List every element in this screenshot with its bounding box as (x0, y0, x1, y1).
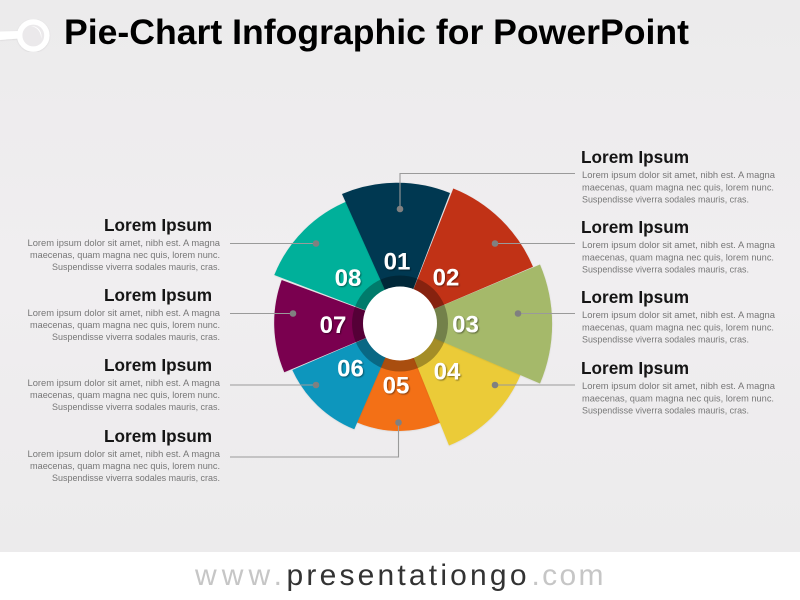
text block 04: maecenas, quam magna nec quis, lorem nunc. (582, 393, 774, 403)
number 07: 07 (320, 312, 346, 339)
text block 03 (581, 287, 776, 344)
leader 05 (230, 419, 402, 457)
number 04: 04 (434, 358, 461, 386)
leader 07 (230, 310, 296, 317)
text block 03: maecenas, quam magna nec quis, lorem nunc. (582, 322, 774, 332)
footer url: presentationgo (286, 559, 526, 592)
wedge 01 (342, 183, 450, 324)
text block 05: Lorem Ipsum (104, 426, 212, 446)
number 01: 01 (384, 248, 410, 276)
wedge 04 (400, 324, 521, 446)
footer url: www. (194, 559, 282, 592)
text block 01: Suspendisse viverra sodales mauris, cras. (582, 194, 749, 204)
text block 06: Suspendisse viverra sodales mauris, cras. (52, 402, 220, 412)
number 05: 05 (383, 372, 409, 400)
number 06: 06 (337, 356, 364, 382)
text block 05 (28, 426, 221, 483)
text block 02: Suspendisse viverra sodales mauris, cras. (582, 264, 749, 274)
leader 01 (397, 174, 575, 212)
text block 01: maecenas, quam magna nec quis, lorem nunc. (582, 182, 774, 192)
wedge 06 (292, 324, 400, 429)
text block 08: Lorem Ipsum (104, 215, 212, 235)
text block 08: maecenas, quam magna nec quis, lorem nunc. (30, 250, 220, 260)
number 03: 03 (452, 312, 479, 338)
text block 04: Lorem ipsum dolor sit amet, nibh est. A magna (582, 381, 776, 391)
footer url: .com (532, 559, 604, 592)
footer band (0, 552, 800, 600)
wedge 05 (356, 324, 441, 431)
text block 05: maecenas, quam magna nec quis, lorem nunc. (30, 461, 220, 471)
text block 04: Suspendisse viverra sodales mauris, cras. (582, 405, 749, 415)
text block 02: Lorem ipsum dolor sit amet, nibh est. A magna (582, 240, 776, 250)
text block 02 (581, 217, 776, 274)
text block 07 (28, 285, 221, 342)
text block 05: Suspendisse viverra sodales mauris, cras. (52, 473, 220, 483)
leader 04 (492, 382, 575, 388)
text block 02: Lorem Ipsum (581, 217, 689, 237)
wedge 08 (274, 200, 400, 324)
text block 08: Suspendisse viverra sodales mauris, cras. (52, 262, 220, 272)
text block 01 (581, 147, 776, 204)
text block 01: Lorem Ipsum (581, 147, 689, 167)
icon: logo ring (0, 22, 47, 49)
text block 06: Lorem Ipsum (104, 355, 212, 375)
text block 07: maecenas, quam magna nec quis, lorem nunc. (30, 320, 220, 330)
inner dark ring (352, 276, 448, 372)
center hole (363, 286, 437, 360)
text block 03: Lorem ipsum dolor sit amet, nibh est. A magna (582, 310, 776, 320)
text block 08 (28, 215, 221, 272)
text block 07: Suspendisse viverra sodales mauris, cras. (52, 332, 220, 342)
leader 06 (230, 382, 319, 388)
leader 08 (230, 240, 319, 247)
title: Pie-Chart Infographic for PowerPoint (64, 13, 689, 52)
leader 02 (492, 240, 575, 247)
text block 03: Suspendisse viverra sodales mauris, cras. (582, 334, 749, 344)
text block 05: Lorem ipsum dolor sit amet, nibh est. A magna (28, 449, 221, 459)
footer url (194, 559, 604, 592)
text block 01: Lorem ipsum dolor sit amet, nibh est. A magna (582, 170, 776, 180)
text block 06 (28, 355, 221, 412)
text block 06: Lorem ipsum dolor sit amet, nibh est. A magna (28, 378, 221, 388)
text block 08: Lorem ipsum dolor sit amet, nibh est. A magna (28, 238, 221, 248)
number 02: 02 (433, 264, 459, 292)
leader 03 (515, 310, 575, 317)
pie chart (274, 183, 552, 446)
number 08: 08 (335, 265, 361, 292)
text block 03: Lorem Ipsum (581, 287, 689, 307)
text block 04 (581, 358, 776, 415)
wedge 02 (400, 188, 533, 324)
text block 07: Lorem ipsum dolor sit amet, nibh est. A magna (28, 308, 221, 318)
text block 06: maecenas, quam magna nec quis, lorem nunc. (30, 390, 220, 400)
wedge 03 (400, 264, 552, 384)
text block 02: maecenas, quam magna nec quis, lorem nunc. (582, 252, 774, 262)
wedge 07 (274, 280, 400, 372)
text block 07: Lorem Ipsum (104, 285, 212, 305)
text block 04: Lorem Ipsum (581, 358, 689, 378)
